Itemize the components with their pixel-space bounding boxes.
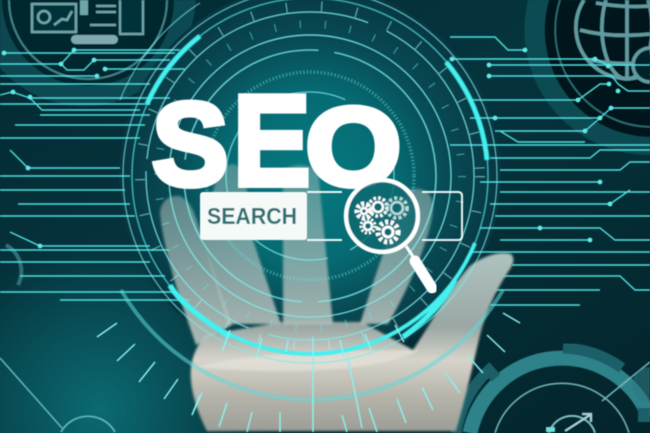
- circuit lines: [0, 37, 650, 305]
- letter S: S: [152, 78, 228, 210]
- icon: globe: [576, 0, 650, 82]
- icon: tablet: [120, 0, 143, 34]
- panel: top-right globe circle: [524, 0, 650, 155]
- panel: bottom-left circle: [0, 245, 115, 432]
- icon: monitor with charts: [32, 0, 116, 32]
- panel: central circle core: [119, 0, 501, 367]
- little finger: [160, 196, 232, 345]
- palm and thumb: [191, 253, 513, 431]
- icon: keyboard pill: [71, 35, 118, 44]
- middle finger: [283, 165, 333, 324]
- concentric HUD rings: [120, 0, 503, 400]
- hand: [160, 164, 513, 431]
- letter E: E: [233, 69, 310, 213]
- panel: top-left device circle: [0, 0, 196, 106]
- panel: bottom-right chart circle: [456, 348, 650, 433]
- search bar: [200, 192, 462, 240]
- palm crease highlight: [192, 350, 420, 371]
- SEO title: [152, 69, 401, 213]
- arrow: growth: [565, 414, 591, 431]
- bright glow arcs: [147, 36, 487, 354]
- icon: magnifying glass with gears: [346, 180, 432, 288]
- ring finger: [203, 164, 281, 324]
- radial tick marks: [97, 313, 520, 432]
- circuit nodes: [2, 48, 620, 248]
- letter O: O: [306, 85, 401, 209]
- icon: gears: [357, 198, 407, 242]
- index finger: [360, 189, 433, 324]
- search label: SEARCH: [207, 203, 297, 229]
